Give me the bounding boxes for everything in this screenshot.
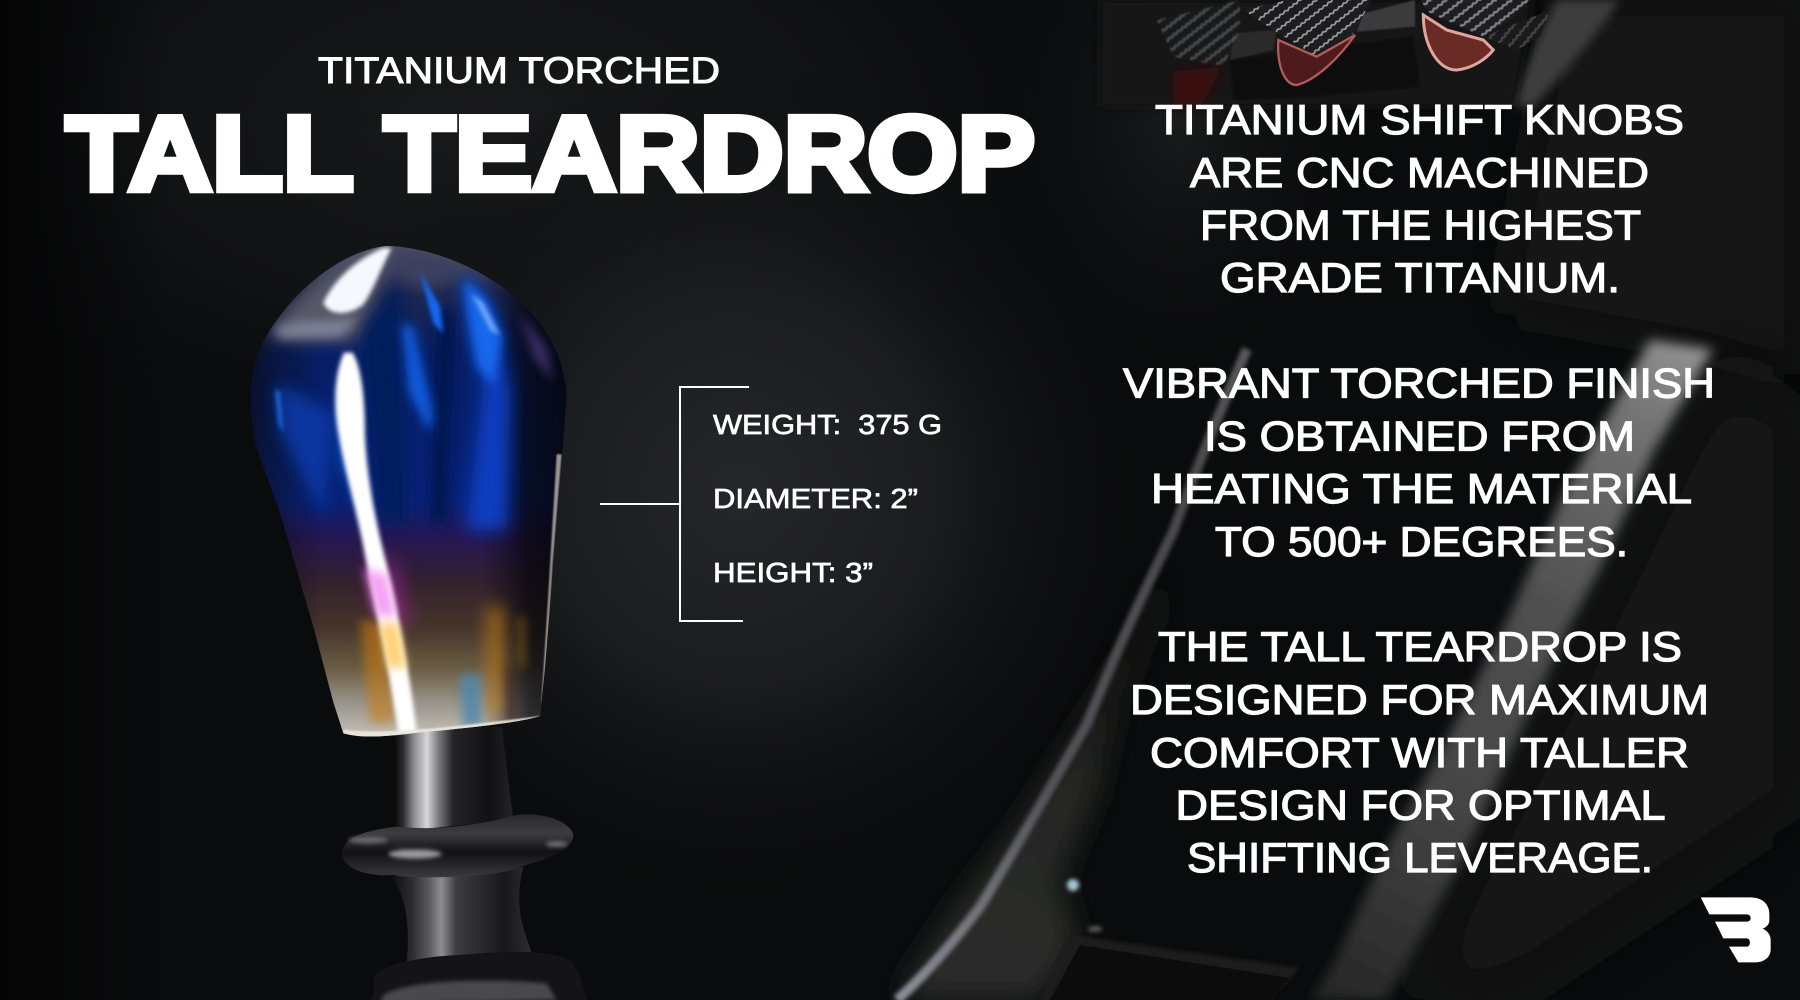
text block: tall teardrop design: DESIGN FOR OPTIMAL <box>1176 782 1666 828</box>
specifications list <box>713 409 942 588</box>
brushed gray crown <box>267 244 387 341</box>
carbon patch <box>1040 935 1300 1000</box>
car interior: console and trim <box>897 0 1800 1000</box>
car interior: carbon shifter buttons at top <box>1100 0 1620 107</box>
text block: tall teardrop design: THE TALL TEARDROP IS <box>1158 623 1682 670</box>
text block: tall teardrop design: DESIGNED FOR MAXIMUM <box>1130 676 1709 723</box>
navy channel <box>363 279 407 523</box>
text block: tall teardrop design <box>1130 623 1709 881</box>
subtitle: Titanium Torched: TITANIUM TORCHED <box>318 50 720 91</box>
thin curved trim line <box>897 349 1247 1000</box>
text block: vibrant torched finish: TO 500+ DEGREES. <box>1215 518 1628 565</box>
specular highlights <box>323 248 392 313</box>
text block: tall teardrop design: COMFORT WITH TALLER <box>1150 729 1689 776</box>
bright diagonal trim band <box>1310 340 1713 1000</box>
magenta and gold lower bands <box>367 547 413 626</box>
text block: titanium shift knobs: TITANIUM SHIFT KNOBS <box>1155 96 1684 143</box>
collar ring <box>342 814 573 877</box>
specifications list: DIAMETER: 2” <box>713 483 918 514</box>
icon: brand logo <box>1701 897 1771 962</box>
shift knob: titanium torched teardrop <box>251 246 567 736</box>
specifications bracket <box>600 387 749 621</box>
text block: titanium shift knobs: FROM THE HIGHEST <box>1200 202 1641 248</box>
base flange <box>360 952 597 1000</box>
blue streaks <box>420 272 443 334</box>
text block: vibrant torched finish: VIBRANT TORCHED FINISH <box>1123 360 1715 406</box>
title <box>66 50 1035 213</box>
text block: titanium shift knobs <box>1155 96 1684 301</box>
text block: vibrant torched finish: IS OBTAINED FROM <box>1204 412 1635 460</box>
text block: vibrant torched finish: HEATING THE MATERIAL <box>1151 465 1692 512</box>
specifications list: WEIGHT: 375 G <box>713 409 942 440</box>
shift knob shaft <box>342 727 597 1000</box>
text block: titanium shift knobs: GRADE TITANIUM. <box>1220 254 1620 301</box>
specifications list: HEIGHT: 3” <box>713 557 873 588</box>
lower stem <box>390 867 533 963</box>
right side console shade <box>1400 350 1800 1000</box>
upper right dark trim <box>1500 0 1800 380</box>
console surface with olive tone <box>897 560 1165 1000</box>
text block: vibrant torched finish <box>1123 360 1715 565</box>
text block: titanium shift knobs: ARE CNC MACHINED <box>1190 149 1649 196</box>
text block: tall teardrop design: SHIFTING LEVERAGE. <box>1187 834 1653 881</box>
main title: Tall Teardrop: TALL TEARDROP <box>66 95 1035 213</box>
upper neck <box>393 727 513 832</box>
